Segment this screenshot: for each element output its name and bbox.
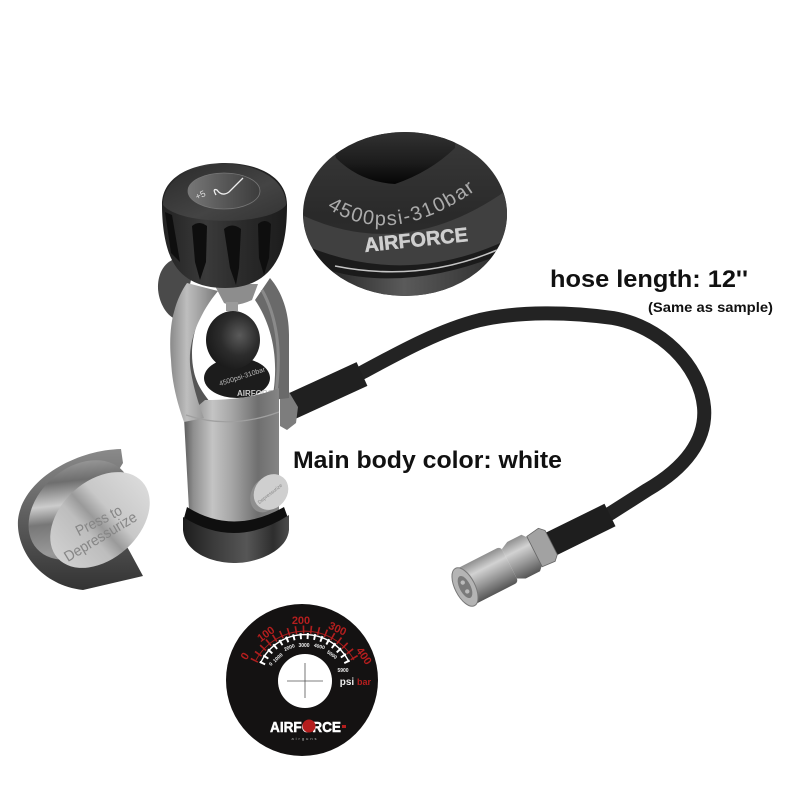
lock nut [526, 526, 560, 568]
hose tube [350, 313, 704, 520]
bar numerals: 0 [239, 651, 252, 662]
knob top [163, 164, 286, 221]
psi numerals: 4000 [313, 643, 326, 651]
left arm inner face [184, 295, 212, 406]
lens base [300, 130, 510, 300]
base [183, 515, 289, 563]
bar numerals: 100 [255, 624, 277, 645]
lens gray band [304, 190, 507, 268]
coupler socket [455, 574, 475, 600]
button side [245, 473, 285, 517]
lens bright line [335, 250, 497, 272]
elbow fitting [280, 392, 298, 430]
main body [184, 388, 279, 525]
rating engraving: 4500psi-310bar [329, 182, 472, 230]
depressurize button [245, 467, 295, 517]
upper dark stem [330, 130, 456, 184]
gauge dial face [226, 604, 378, 756]
red scale arc [256, 631, 354, 660]
socket pins [460, 580, 470, 594]
white scale ticks [262, 636, 348, 664]
psi numerals: 0 [268, 661, 275, 667]
window [278, 654, 332, 708]
dial brand: AIRFORCE [270, 719, 341, 736]
callout: same as sample: (Same as sample) [648, 299, 773, 315]
psi numerals: 5900 [337, 668, 349, 674]
crosshair [287, 663, 323, 698]
knob label disc [188, 173, 260, 209]
knob side [162, 163, 287, 288]
label marks: +5 [194, 188, 207, 202]
neck [214, 284, 258, 305]
knob flutes [165, 212, 271, 285]
bar numerals: 400 [353, 645, 374, 667]
ring brand: AIRFORCE [237, 389, 279, 398]
black base groove [184, 507, 288, 535]
psi numerals: 3000 [298, 643, 310, 649]
airguns: airguns [291, 736, 319, 741]
psi numerals: 2000 [283, 643, 296, 653]
brand target [302, 720, 316, 732]
white scale arc [261, 635, 349, 662]
hex nut [500, 533, 544, 582]
knob [162, 163, 287, 288]
face text line one: Press to [73, 502, 125, 540]
coupler body [456, 546, 519, 605]
left frame arm [170, 283, 218, 422]
outer crescent [18, 449, 143, 590]
quick coupler [447, 524, 561, 610]
right frame arm [255, 278, 289, 400]
psi numerals [268, 643, 349, 674]
callout: body color: Main body color: white [293, 447, 562, 474]
dial disc [226, 604, 378, 756]
button face [32, 453, 168, 587]
lower hose sleeve [543, 515, 610, 548]
body collar line [186, 412, 279, 422]
hose assembly [280, 313, 704, 610]
zoom lens: press to depressurize [9, 440, 168, 590]
lower black ring [204, 358, 270, 398]
button text: Depressurize [257, 483, 284, 506]
lens dark strip [312, 243, 500, 278]
lens brand: AIRFORCE [363, 224, 469, 257]
label glyph [214, 178, 243, 195]
red scale ticks [254, 629, 356, 661]
bar numerals [239, 615, 374, 667]
face text line two: Depressurize [61, 509, 140, 566]
bar numerals: 200 [292, 615, 310, 627]
rear gauge dial [158, 259, 192, 319]
callout: hose length: hose length: 12'' [550, 266, 748, 293]
psi numerals: 1000 [272, 652, 285, 664]
stem [226, 302, 238, 311]
bar numerals: 300 [326, 620, 348, 639]
cylinder side [9, 440, 151, 580]
psi label: psi [340, 677, 354, 688]
regulator [158, 163, 295, 563]
psi numerals: 5000 [325, 650, 338, 661]
coupler face [447, 564, 483, 610]
zoom lens: pressure rating [303, 132, 507, 296]
upper hose sleeve [290, 374, 362, 407]
button face [247, 467, 295, 517]
ring engraving: 4500psi-310bar [218, 366, 267, 388]
lens bottom band [332, 258, 490, 296]
right arm rim [262, 290, 278, 392]
brand suffix [342, 725, 346, 728]
ball [206, 311, 260, 369]
bar label: bar [357, 677, 371, 687]
